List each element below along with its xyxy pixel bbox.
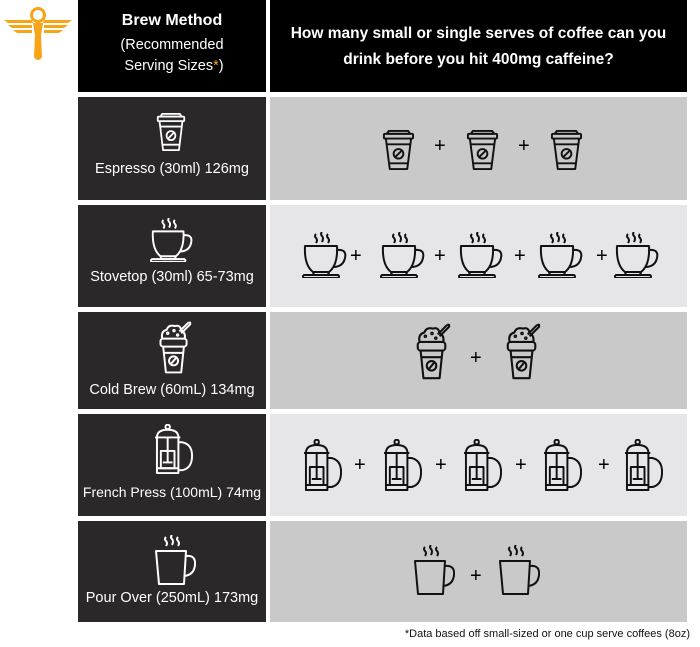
row: stovetop servings: +	[434, 245, 446, 267]
header: brew method: (Recommended	[120, 37, 224, 53]
row: pour over servings	[270, 521, 687, 622]
row: espresso servings	[270, 97, 687, 200]
row: cold brew servings: +	[470, 347, 482, 369]
icon: mug	[155, 535, 196, 585]
row: french press servings: +	[515, 454, 527, 476]
footnote: *Data based off small-sized or one cup serve coffees (8oz)	[405, 628, 690, 640]
header: brew method	[78, 0, 266, 92]
icon: french press	[155, 424, 193, 474]
header: brew method: Brew Method	[122, 12, 222, 29]
header: question: drink before you hit 400mg caffeine?	[343, 51, 614, 68]
row: french press label	[78, 414, 266, 516]
row: stovetop label: Stovetop (30ml) 65-73mg	[90, 269, 254, 285]
header: question	[270, 0, 687, 92]
row: espresso label: Espresso (30ml) 126mg	[95, 161, 249, 177]
row: espresso servings: +	[518, 135, 530, 157]
row: stovetop servings	[270, 205, 687, 307]
row: pour over label	[78, 521, 266, 622]
row: espresso servings: +	[434, 135, 446, 157]
row: pour over servings: +	[470, 565, 482, 587]
row: cold brew label: Cold Brew (60mL) 134mg	[89, 382, 255, 398]
row: cold brew label	[78, 312, 266, 409]
row: stovetop label	[78, 205, 266, 307]
row: stovetop servings: +	[350, 245, 362, 267]
row: french press label: French Press (100mL) 74mg	[83, 484, 261, 500]
icon: teacup	[150, 218, 192, 262]
logo: winged portafilter	[4, 7, 72, 60]
row: stovetop servings: +	[514, 245, 526, 267]
header: brew method: Serving Sizes*)	[124, 58, 224, 74]
row: french press servings: +	[598, 454, 610, 476]
row: cold brew servings	[270, 312, 687, 409]
row: french press servings: +	[435, 454, 447, 476]
header: question: How many small or single serves of coffee can you	[291, 25, 666, 42]
icon: takeaway cup	[156, 113, 186, 151]
row: stovetop servings: +	[596, 245, 608, 267]
row: french press servings: +	[354, 454, 366, 476]
icon: frappe cup	[160, 322, 192, 374]
row: pour over label: Pour Over (250mL) 173mg	[86, 590, 258, 606]
row: french press servings	[270, 414, 687, 516]
row: espresso label	[78, 97, 266, 200]
